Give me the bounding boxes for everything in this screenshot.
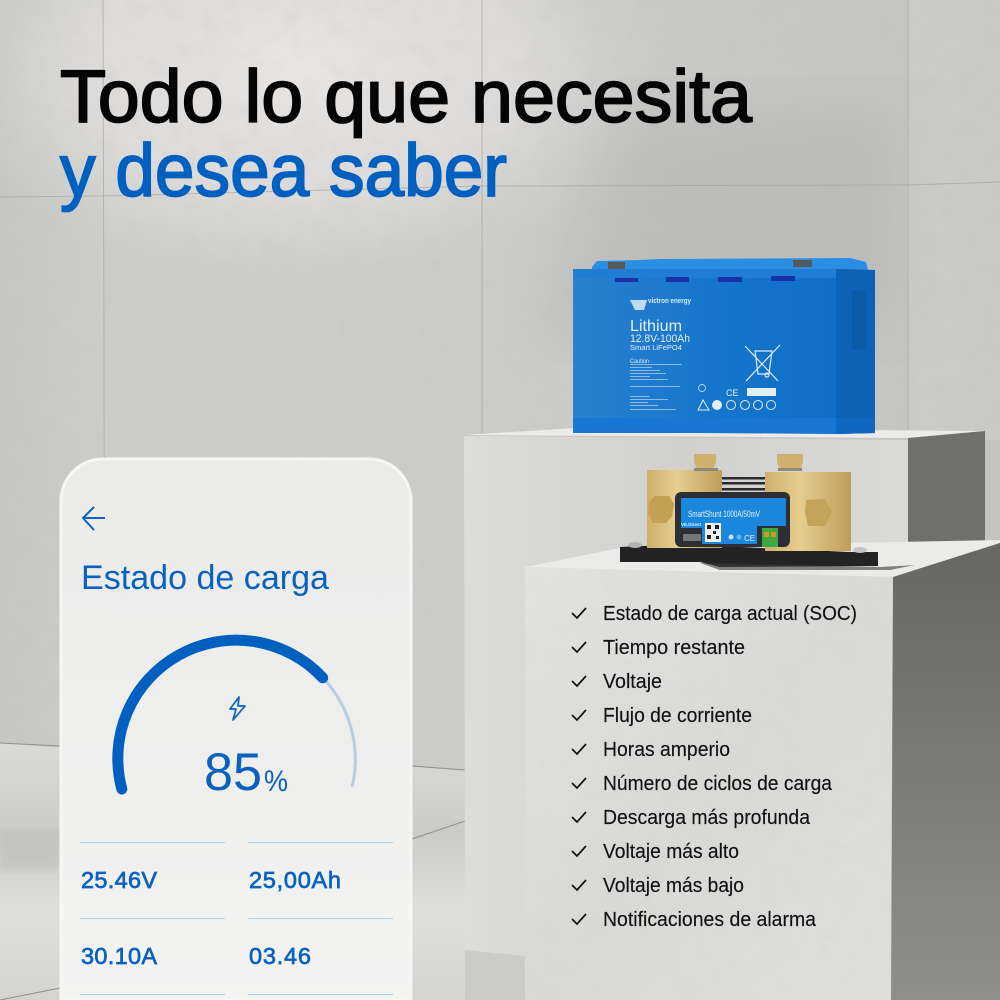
icon: bolt xyxy=(230,697,245,720)
stats table xyxy=(80,842,393,994)
shunt base plate xyxy=(620,542,915,570)
stats table: 30.10A xyxy=(81,943,157,969)
battery logo xyxy=(630,298,691,310)
card heading: Estado de carga xyxy=(81,559,329,597)
checklist labels: Voltaje más bajo xyxy=(603,875,744,897)
checklist labels: Estado de carga actual (SOC) xyxy=(603,603,857,625)
smart shunt xyxy=(620,454,915,570)
checklist labels: Descarga más profunda xyxy=(603,807,811,829)
checklist labels: Notificaciones de alarma xyxy=(603,909,817,931)
battery compliance marks: CE xyxy=(726,388,739,398)
gauge value: 85 xyxy=(204,743,262,802)
battery labels xyxy=(630,318,690,410)
battery compliance marks xyxy=(698,384,776,410)
battery logo: victron energy xyxy=(648,298,691,305)
battery xyxy=(573,258,875,434)
floor xyxy=(0,743,465,1000)
shunt module: VE.Direct xyxy=(681,522,702,527)
icon: back arrow xyxy=(83,507,105,530)
pedestal: front block xyxy=(525,540,1000,1000)
title xyxy=(60,55,753,212)
check icons xyxy=(572,608,586,924)
shunt module xyxy=(675,492,790,547)
battery terminals xyxy=(608,260,812,269)
checklist labels: Voltaje más alto xyxy=(603,841,739,863)
title: Todo lo que necesita xyxy=(60,55,753,138)
shunt bolts xyxy=(648,454,832,526)
battery labels: Lithium xyxy=(630,318,682,335)
title: y desea saber xyxy=(60,129,507,212)
panel: state of charge card xyxy=(61,459,411,1000)
checklist labels: Tiempo restante xyxy=(603,637,745,659)
icon: crossed-out bin xyxy=(745,345,780,381)
stats table: 25,00Ah xyxy=(249,867,341,893)
stats table: 03.46 xyxy=(249,943,311,969)
pedestal: back block xyxy=(463,428,985,1000)
checklist xyxy=(572,603,857,931)
gauge value: % xyxy=(264,765,288,798)
checklist labels xyxy=(603,603,857,931)
checklist labels: Flujo de corriente xyxy=(603,705,752,727)
checklist labels: Horas amperio xyxy=(603,739,730,761)
shunt module: SmartShunt 1000A/50mV xyxy=(688,509,760,520)
checklist labels: Voltaje xyxy=(603,671,662,693)
gauge xyxy=(118,640,355,789)
battery vents xyxy=(615,276,795,282)
checklist labels: Número de ciclos de carga xyxy=(603,773,833,795)
battery labels: 12.8V-100Ah xyxy=(630,333,690,345)
shunt brass blocks xyxy=(647,470,851,551)
battery labels: Smart LiFePO4 xyxy=(630,343,682,352)
shunt module: CE xyxy=(744,534,755,543)
battery labels: Caution xyxy=(630,359,649,365)
stats table: 25.46V xyxy=(81,867,157,893)
